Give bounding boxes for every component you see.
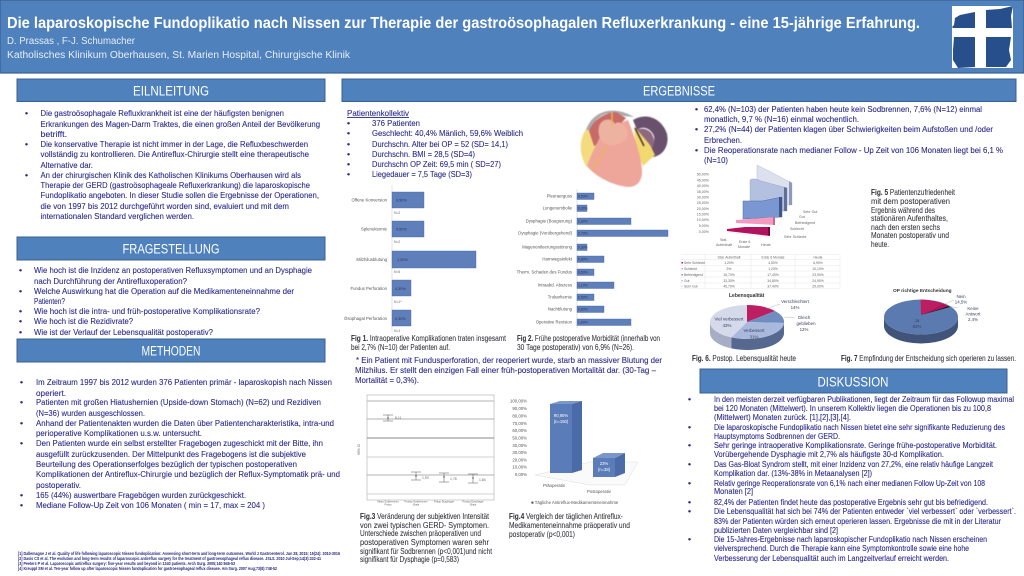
text block: Patientenkollektiv: Durchschn. BMI = 28,5 (SD=4) — [372, 149, 475, 159]
text block: Einleitung: internationalen Standard verglichen werden. — [40, 211, 194, 221]
chart: Fig 7 decision pie: 14,5% — [955, 300, 967, 304]
chart: Fig 4 medication intake: 60,00% — [512, 428, 527, 433]
references: [4] Kreuppl SM et al. Ten-year follow up after laparoscopic Nissen fundoplication for gastroesophageal reflux disease. Am Surg. 2007 Aug;73(8):748-52 — [18, 566, 277, 571]
references: [3] Peeters P et al. Laparoscopic antireflux surgery: five-year results and beyond in 1340 patients. Arch Surg. 2005;140:946-53 — [18, 561, 235, 566]
text block: Fragestellung: Wie hoch ist die Inzidenz an postoperativen Refluxsymptomen und an Dysphagie — [34, 265, 312, 275]
chart: Fig 4 medication intake: 10,00% — [512, 464, 527, 470]
chart: Fig 7 decision pie: Antwort — [966, 312, 981, 316]
chart: Fig 6 quality of life pie: 12% — [800, 327, 808, 332]
chart: Fig 2 postoperative morbidity: Nachblutung — [548, 306, 573, 312]
chart: Fig 1 intraoperative complications: N=1* — [394, 300, 402, 304]
chart: Fig 6 quality of life pie: Gleich — [798, 315, 811, 320]
chart: Fig 5 satisfaction 3D area chart: 35,00% — [697, 190, 710, 194]
heading: Diskussion — [700, 369, 1007, 393]
chart: Fig 3 symptom intensity: 95% CI — [357, 444, 361, 455]
text block: results bullets: • — [695, 104, 698, 114]
text block: Diskussion: • — [688, 440, 691, 450]
text block: results bullets: • — [695, 145, 698, 155]
text block: Methoden: perioperative Komplikationen u.s.w. untersucht. — [36, 428, 202, 438]
caption: Fig 3: signifikant für Sodbrennen (p<0,001)und nicht — [360, 547, 493, 556]
text block: Fragestellung: • — [19, 265, 22, 275]
caption: Fig 2: Fig 2. Frühe postoperative Morbidität (innerhalb von — [517, 334, 660, 343]
chart: Fig 7 decision pie: 83% — [913, 324, 921, 329]
caption: Fig 6: Fig. 6. Postop. Lebensqualität heute — [692, 354, 796, 363]
text block: Diskussion: Verbesserung der Lebensqualität auch im Langzeitverlauf erreicht werden. — [714, 553, 949, 563]
chart: Fig 4 medication intake: ■ Tägliche Antireflux-Medikamenteneinnahme — [531, 500, 619, 505]
text block: results bullets: • — [695, 124, 698, 134]
table: Fig 5 data: 4,50% — [768, 261, 778, 265]
heading: Ergebnisse: ERGEBNISSE — [643, 84, 715, 98]
text block: Methoden: postoperativ. — [36, 480, 81, 490]
chart: Fig 2 postoperative morbidity: 0,50% — [578, 296, 588, 300]
caption: Fig 1: bei 2,7% (N=10) der Patienten auf. — [351, 343, 450, 352]
icon: hospital cross logo — [952, 6, 1013, 68]
text block: Fragestellung: Wie hoch ist die Rezidivrate? — [34, 316, 133, 326]
text block: Einleitung: Erkrankungen des Magen-Darm Traktes, die einen großen Anteil der Bevölkerung — [40, 119, 320, 129]
text block: Einleitung: • — [25, 170, 28, 180]
text block: Fragestellung: • — [19, 286, 22, 296]
chart: Fig 1 intraoperative complications: Fundus Perforation — [350, 286, 388, 291]
caption: Fig 3 — [360, 512, 493, 564]
table: Fig 5 data — [681, 254, 840, 288]
text block: Patientenkollektiv: Geschlecht: 40,4% Mänlich, 59,6% Weiblich — [372, 128, 523, 138]
text block: Fragestellung: • — [19, 306, 22, 316]
chart: Fig 1 intraoperative complications: N=1 — [394, 329, 400, 333]
chart: Fig 2 postoperative morbidity: Magenentleerungsstörung — [522, 244, 573, 250]
chart: Fig 3 symptom intensity: 1,78 — [450, 477, 457, 481]
chart: Fig 2 postoperative morbidity: Therm. Schaden des Fundus — [517, 270, 572, 274]
text block: Diskussion: publizierten Daten vergleichbar sind [2] — [714, 525, 838, 535]
chart: Fig 6 quality of life pie: Lebensqualität — [729, 293, 765, 299]
caption: Fig 3: Fig.3 Veränderung der subjektiven Intensität — [360, 512, 490, 521]
text block: mortality note: * Ein Patient mit Fundusperforation, der reoperiert wurde, starb an massiver Blutung der — [356, 355, 662, 365]
references — [18, 551, 340, 571]
chart: Fig 4 medication intake — [510, 398, 638, 505]
chart: Fig 4 medication intake: 80,00% — [512, 414, 527, 418]
chart: Fig 3 symptom intensity: 1,84 — [479, 478, 486, 482]
text block: Patientenkollektiv: 376 Patienten — [372, 118, 420, 128]
heading: Fragestellung: FRAGESTELLUNG — [122, 242, 220, 256]
affiliation: Katholisches Klinikum Oberhausen, St. Marien Hospital, Chirurgische Klinik — [7, 50, 351, 61]
text block: Patientenkollektiv: • — [347, 149, 350, 159]
chart: Fig 2 postoperative morbidity: Trokarhernie — [548, 294, 573, 300]
text block: Fragestellung: Welche Auswirkung hat die Operation auf die Medikamenteneinnahme der — [34, 286, 294, 296]
text block: Einleitung: betrifft. — [40, 129, 67, 139]
chart: Fig 5 satisfaction 3D area chart: Monate — [738, 245, 750, 249]
chart: Fig 3 symptom intensity: Präop Dysphagie — [434, 500, 455, 504]
chart: Fig 2 postoperative morbidity: Pleuraerguss — [547, 194, 572, 198]
text block: Fragestellung: Wie ist der Verlauf der Lebensqualität postoperativ? — [34, 327, 213, 337]
text block: Methoden: Beurteilung des Operationserfolges bezüglich der typischen postoperativen — [36, 459, 297, 469]
chart: Fig 5 satisfaction 3D area chart: 45,00% — [697, 178, 710, 182]
caption: Fig 5 — [871, 188, 956, 249]
chart: Fig 1 intraoperative complications: N=5 — [394, 270, 400, 274]
text block: mortality note: Mortalität = 0,3%). — [355, 375, 419, 385]
chart: Fig 1 intraoperative complications: 0,50% — [396, 228, 407, 232]
icon: stomach illustration — [581, 111, 668, 187]
chart: Fig 2 postoperative morbidity: 0,80% — [578, 308, 588, 312]
text block: Einleitung: vollständig zu kontrollieren. Die Antireflux-Chirurgie stellt eine therapeutische — [40, 149, 309, 159]
chart: Fig 7 decision pie — [884, 288, 981, 344]
text block: Patientenkollektiv: Patientenkollektiv — [347, 108, 410, 118]
chart: Fig 7 decision pie: 2,4% — [968, 317, 978, 322]
table: Fig 5 data: 10,10% — [812, 267, 824, 271]
table: Fig 5 data: Sehr Schlecht — [684, 261, 705, 265]
caption: Fig 3: postoperativen Symptomen waren sehr — [360, 538, 489, 547]
table: Fig 5 data: 3% — [727, 267, 731, 271]
text block: Diskussion: • — [688, 459, 691, 469]
chart: Fig 5 satisfaction 3D area chart: Befriedigend — [795, 221, 815, 225]
chart: Fig 2 postoperative morbidity: Intraabd. Abszess — [538, 282, 572, 288]
table: Fig 5 data: 23,90% — [812, 273, 824, 277]
text block: Diskussion: Vorübergehende Dysphagie mit 2,7% als häufigste 30-d Komplikation. — [714, 449, 944, 459]
table: Fig 5 data: 34,80% — [767, 279, 779, 283]
chart: Fig 3 symptom intensity: Mean Sodbrennen — [377, 500, 399, 504]
chart: Fig 1 intraoperative complications: Ösophagal Perforation — [344, 316, 388, 321]
text block: Fragestellung: Wie hoch ist die intra- und früh-postoperative Komplikationsrate? — [34, 306, 260, 316]
chart: Fig 7 decision pie: Keine — [967, 306, 979, 311]
chart: Fig 1 intraoperative complications: N=2 — [394, 211, 400, 215]
text block: Diskussion — [688, 394, 1016, 563]
references: [1] Dallemagne J et al. Quality of life following laparoscopic Nissen fundoplication: Assessing short-term and long-term outcomes. World J Gastroenterol. Jun 28, 2015; 15(24): 3010-3016 — [18, 551, 340, 556]
title: Die laparoskopische Fundoplikatio nach Nissen zur Therapie der gastroösophagalen Refluxerkrankung - eine 15-jährige Erfahrung. — [7, 15, 920, 32]
chart: Fig 3 symptom intensity: Skala — [470, 502, 477, 506]
chart: Fig 4 medication intake: 20,00% — [512, 458, 527, 462]
chart: Fig 4 medication intake: 50,00% — [512, 436, 527, 440]
chart: Fig 5 satisfaction 3D area chart: 15,00% — [697, 212, 710, 216]
text block: Patientenkollektiv — [347, 108, 523, 179]
chart: Fig 2 postoperative morbidity: Operative Revision — [536, 320, 573, 324]
table: Fig 5 data: Gut — [684, 279, 690, 283]
text block: Methoden: (N=36) wurden ausgeschlossen. — [36, 408, 145, 418]
table: Fig 5 data: 24,90% — [812, 279, 824, 283]
caption: Fig 1 — [351, 334, 507, 352]
caption: Fig 4: Medikamenteneinnahme präoperativ und — [509, 521, 630, 530]
chart: Fig 7 decision pie: Ja — [915, 318, 920, 323]
text block: Methoden: Den Patienten wurde ein selbst erstellter Fragebogen zugeschickt mit der Bitte, ihn — [36, 438, 323, 448]
caption: Fig 5: Fig. 5 Patientenzufriedenheit — [871, 188, 956, 197]
chart: Fig 6 quality of life pie: 14% — [791, 305, 799, 310]
table: Fig 5 data: 33,30% — [723, 279, 735, 283]
text block: Patientenkollektiv: Durchschn OP Zeit: 69,5 min ( SD=27) — [372, 159, 501, 169]
text block: Fragestellung: Patienten? — [34, 296, 65, 306]
chart: Fig 4 medication intake: Postoperativ — [587, 489, 612, 494]
chart: Fig 4 medication intake: (n=38) — [598, 467, 611, 472]
chart: Fig 6 quality of life pie: Verschlechtert — [781, 299, 810, 304]
text block: Methoden: ausgefüllt zurückzusenden. Der Mittelpunkt des Fragebogens ist die subjektive — [36, 449, 306, 459]
text block: Patientenkollektiv: • — [347, 128, 350, 138]
caption: Fig 5: stationären Aufenthaltes, — [871, 214, 948, 223]
table: Fig 5 data: 29,00% — [812, 284, 824, 288]
chart: Fig 6 quality of life pie: Verbessert — [744, 328, 765, 333]
table: Fig 5 data: Sehr Gut — [684, 284, 698, 288]
text block: Diskussion: Hauptsymptoms Sodbrennen der GERD. — [714, 431, 840, 441]
chart: Fig 1 intraoperative complications: 0,50% — [396, 198, 407, 202]
table: Fig 5 data: 16,70% — [723, 273, 735, 277]
authors: D. Prassas , F-J. Schumacher — [7, 36, 136, 47]
text block: mortality note — [355, 355, 662, 385]
text block: Fragestellung: nach Durchführung der Antirefluxoperation? — [34, 276, 187, 286]
text block: Fragestellung: • — [19, 316, 22, 326]
text block: Diskussion: • — [688, 497, 691, 507]
chart: Fig 3 symptom intensity — [357, 395, 494, 506]
chart: Fig 5 satisfaction 3D area chart: 30,00% — [697, 196, 710, 200]
text block: Diskussion: (Mittelwert) Monaten zurück. [1],[2],[3],[4]. — [714, 412, 851, 422]
text block: Diskussion: • — [688, 534, 691, 544]
chart: Fig 5 satisfaction 3D area chart: Heute — [761, 243, 771, 247]
chart: Fig 2 postoperative morbidity: Lungenembolie — [543, 206, 573, 210]
chart: Fig 4 medication intake: 90,00% — [512, 406, 527, 411]
chart: Fig 1 intraoperative complications: 0,30% — [395, 317, 406, 321]
text block: Diskussion: • — [688, 394, 691, 404]
text block: Methoden: • — [20, 377, 23, 387]
chart: Fig 4 medication intake: Präoperativ — [543, 483, 566, 488]
text block: Methoden: • — [20, 500, 23, 510]
table: Fig 5 data: Schlecht — [684, 267, 697, 271]
heading: Diskussion: DISKUSSION — [818, 374, 888, 390]
heading: Methoden: METHODEN — [142, 344, 200, 358]
caption: Fig 5: heute. — [871, 240, 889, 249]
text block: Einleitung: • — [25, 139, 28, 149]
caption: Fig 5: mit dem postoperativen — [871, 197, 950, 206]
text block: Diskussion: • — [688, 478, 691, 488]
chart: Fig 2 postoperative morbidity: 0,50% — [578, 270, 588, 274]
table: Fig 5 data: Heute — [813, 256, 823, 260]
chart: Fig 5 satisfaction 3D area chart: Sehr Gut — [803, 210, 817, 214]
text block: Methoden: • — [20, 397, 23, 407]
chart: Fig 5 satisfaction 3D area chart — [697, 165, 817, 249]
chart: Fig 5 satisfaction 3D area chart: 40,00% — [697, 184, 710, 188]
text block: Methoden: operiert. — [36, 388, 66, 398]
table: Fig 5 data: 6,90% — [813, 261, 823, 265]
heading: Einleitung — [17, 79, 325, 102]
heading: Fragestellung — [17, 237, 325, 260]
caption: Fig 4: Fig.4 Vergleich der täglichen Antireflux- — [509, 512, 623, 521]
chart: Fig 2 postoperative morbidity — [517, 189, 668, 328]
chart: Fig 2 postoperative morbidity: Dysphagie (Vorübergehend) — [518, 230, 573, 236]
text block: Methoden: Patienten mit großen Hiatushernien (Upside-down Stomach) (N=62) und Rezidiven — [36, 397, 321, 407]
text block: Einleitung: Therapie der GERD (gastroösophageale Refluxerkrankung) die laparoskopische — [40, 180, 310, 190]
table: Fig 5 data: 1,20% — [724, 261, 734, 265]
text block: Diskussion: • — [688, 422, 691, 432]
text block: Patientenkollektiv: • — [347, 118, 350, 128]
caption: Fig 2 — [517, 334, 660, 352]
chart: Fig 6 quality of life pie: 43% — [723, 323, 731, 328]
chart: Fig 2 postoperative morbidity: 0,50% — [578, 194, 588, 198]
chart: Fig 2 postoperative morbidity: 0,80% — [578, 258, 588, 262]
chart: Fig 3 symptom intensity: Postop Dysphagie — [462, 500, 484, 504]
chart: Fig 7 decision pie: OP richtige Entscheidung — [893, 288, 952, 294]
chart: Fig 3 symptom intensity: Präop — [385, 502, 392, 506]
chart: Fig 5 satisfaction 3D area chart: 20,00% — [697, 207, 710, 211]
header banner — [0, 0, 1024, 73]
chart: Fig 3 symptom intensity: 1,93 — [422, 476, 429, 480]
caption: Fig 4 — [509, 512, 630, 539]
heading: Methoden — [17, 339, 325, 362]
chart: Fig 5 satisfaction 3D area chart: Sehr Schlecht — [784, 235, 806, 239]
chart: Fig 2 postoperative morbidity: 0,30% — [578, 246, 588, 250]
chart: Fig 6 quality of life pie: geblieben — [796, 321, 816, 326]
text block: Einleitung: die von 1997 bis 2012 durchgeführt worden sind, evaluiert und mit dem — [40, 201, 289, 211]
chart: Fig 4 medication intake: 90,90% — [554, 413, 568, 418]
text block: mortality note: Milzhilus. Er stellt den einzigen Fall einer früh-postoperativen Mortalität dar. (30-Tag – — [355, 365, 656, 375]
chart: Fig 2 postoperative morbidity: 1,60% — [578, 220, 588, 224]
text block: results bullets: monatlich, 9,7 % (N=16) einmal wochentlich. — [704, 114, 859, 124]
chart: Fig 5 satisfaction 3D area chart: 50,00% — [697, 172, 710, 176]
table: Fig 5 data: 45,70% — [723, 284, 735, 288]
heading: Ergebnisse — [342, 79, 1016, 102]
references: [2] Davis CS et al. The evolution and long-term results of laparoscopic antireflux surgery for the treatment of gastroesophageal reflux disease. JSLS. 2010 Jul-Sep;14(3):332-41 — [18, 556, 321, 561]
chart: Fig 3 symptom intensity: Skala — [413, 502, 420, 506]
chart: Fig 3 symptom intensity: 8,11 — [395, 416, 401, 420]
chart: Fig 1 intraoperative complications: Splenektomie — [361, 226, 388, 232]
text block: results bullets: Erbrechen. — [704, 135, 742, 145]
text block: Einleitung: • — [25, 108, 28, 118]
table: Fig 5 data: 17,40% — [767, 273, 779, 277]
chart: Fig 2 postoperative morbidity: 2,70% — [578, 232, 588, 236]
text block: Einleitung: Fundoplikatio angeboten. In dieser Studie sollen die Ergebnisse der Operationen, — [40, 190, 319, 200]
chart: Fig 3 symptom intensity: Postop Sodbrennen — [405, 500, 428, 504]
chart: Fig 5 satisfaction 3D area chart: Aufenthalt — [716, 243, 732, 247]
caption: Fig 2: 30 Tage postoperativ) von 6,9% (N=26). — [517, 343, 634, 352]
caption: Fig 5: Monaten postoperativ und — [871, 231, 949, 240]
text block: results bullets: (N=10) — [704, 155, 728, 165]
chart: Fig 6 quality of life pie: 31% — [750, 334, 758, 340]
text block: Patientenkollektiv: Durchschn. Alter bei OP = 52 (SD= 14,1) — [372, 139, 508, 149]
chart: Fig 4 medication intake: (n=150) — [554, 419, 569, 424]
chart: Fig 2 postoperative morbidity: 1,60% — [578, 320, 588, 324]
chart: Fig 2 postoperative morbidity: Harnwegsinfekt — [542, 256, 573, 262]
text block: Methoden — [20, 377, 340, 510]
chart: Fig 1 intraoperative complications: N=2 — [394, 240, 400, 244]
caption: Fig 3: Unterschiede zwischen präoperativen und — [360, 529, 481, 538]
chart: Fig 5 satisfaction 3D area chart: 5,00% — [699, 224, 710, 228]
text block: Patientenkollektiv: • — [347, 169, 350, 179]
caption: Fig 1: Fig 1. Intraoperative Komplikationen traten insgesamt — [351, 334, 507, 343]
text block: Einleitung: Die gastroösophagale Refluxkrankheit ist eine der häufigsten benignen — [40, 108, 284, 118]
table: Fig 5 data: 1,20% — [768, 267, 778, 271]
heading: Einleitung: EILNLEITUNG — [133, 84, 209, 98]
chart: Fig 2 postoperative morbidity: 1,10% — [578, 284, 588, 288]
chart: Fig 5 satisfaction 3D area chart: 25,00% — [697, 201, 710, 205]
chart: Fig 5 satisfaction 3D area chart: Erste 6 — [739, 240, 750, 244]
chart: Fig 6 quality of life pie — [710, 293, 816, 350]
chart: Fig 5 satisfaction 3D area chart: 0,00% — [699, 230, 710, 234]
text block: results bullets: 27,2% (N=44) der Patienten klagen über Schwierigkeiten beim Aufstoßen und /oder — [704, 124, 993, 134]
text block: Methoden: • — [20, 490, 23, 500]
caption: Fig 4: postoperativ (p<0,001) — [509, 530, 575, 539]
table: Fig 5 data: 37,40% — [767, 284, 779, 288]
chart: Fig 5 satisfaction 3D area chart: Gut — [799, 215, 805, 219]
caption: Fig 5: nach den ersten sechs — [871, 223, 940, 232]
chart: Fig 1 intraoperative complications: 1,30% — [397, 258, 408, 262]
chart: Fig 5 satisfaction 3D area chart: 10,00% — [697, 218, 710, 222]
text block: results bullets: 62,4% (N=103) der Patienten haben heute kein Sodbrennen, 7,6% (N=12) einmal — [704, 104, 982, 114]
text block: Diskussion: Monaten [2] — [714, 486, 753, 496]
chart: Fig 4 medication intake: 100,00% — [510, 398, 527, 404]
text block: Fragestellung: • — [19, 327, 22, 337]
text block: Methoden: Anhand der Patientenakten wurden die Daten über Patientencharakteristika, intra-und — [36, 418, 334, 428]
text block: Methoden: 165 (44%) auswertbare Fragebögen wurden zurückgeschickt. — [36, 490, 246, 500]
chart: Fig 5 satisfaction 3D area chart: Stat. — [720, 238, 727, 242]
chart: Fig 4 medication intake: 0,00% — [515, 472, 527, 477]
text block: Einleitung — [25, 108, 320, 221]
text block: Methoden: • — [20, 438, 23, 448]
text block: Diskussion: Komplikation dar. (13%-38% in Metaanalysen [2]) — [714, 468, 872, 478]
chart: Fig 5 satisfaction 3D area chart: Schlecht — [790, 227, 804, 231]
text block: Einleitung: Alternative dar. — [40, 160, 93, 170]
chart: Fig 1 intraoperative complications — [344, 185, 476, 333]
text block: Methoden: Mediane Follow-Up Zeit von 106 Monaten ( min = 17, max = 204 ) — [36, 500, 265, 510]
chart: Fig 4 medication intake: 23% — [600, 461, 608, 466]
caption: Fig 3: von zwei typischen GERD- Symptomen. — [360, 521, 489, 530]
text block: Diskussion: vielversprechend. Durch die Therapie kann eine Symptomkontrolle sowie eine hohe — [714, 543, 969, 553]
caption: Fig 3: signifikant für Dysphagie (p=0,583) — [360, 555, 459, 564]
text block: Patientenkollektiv: • — [347, 159, 350, 169]
chart: Fig 2 postoperative morbidity: 0,30% — [578, 206, 588, 210]
text block: results bullets — [695, 104, 1003, 165]
text block: Patientenkollektiv: • — [347, 139, 350, 149]
table: Fig 5 data: Stat. Aufenthalt — [718, 256, 741, 260]
text block: Methoden: Im Zeitraum 1997 bis 2012 wurden 376 Patienten primär - laparoskopish nach Nissen — [36, 377, 332, 387]
text block: Einleitung: An der chirurgischen Klinik des Katholischen Klinikums Oberhausen wird als — [40, 170, 301, 180]
table: Fig 5 data: Befriedigend — [684, 273, 703, 277]
chart: Fig 7 decision pie: Nein — [956, 294, 966, 299]
chart: Fig 1 intraoperative complications: Offene Konversion — [351, 198, 388, 202]
text block: results bullets: Die Reoperationsrate nach medianer Follow - Up Zeit von 106 Monaten liegt bei 6,1 % — [704, 145, 1003, 155]
chart: Fig 1 intraoperative complications: 0,30% — [395, 287, 406, 291]
text block: Einleitung: Die konservative Therapie ist nicht immer in der Lage, die Refluxbeschwerden — [40, 139, 308, 149]
text block: Diskussion: • — [688, 506, 691, 516]
text block: Fragestellung — [19, 265, 312, 337]
chart: Fig 4 medication intake: 40,00% — [512, 443, 527, 448]
chart: Fig 1 intraoperative complications: Milzhilusblutung — [356, 257, 388, 262]
caption: Fig 5: Ergebnis während des — [871, 206, 935, 215]
table: Fig 5 data: Erste 6 Monate — [762, 256, 785, 260]
text block: Methoden: Komplikationen der Antireflux-Chirurgie und bezüglich der Reflux-Symptomatik prä- und — [36, 469, 340, 479]
chart: Fig 6 quality of life pie: Viel verbessert — [715, 316, 744, 322]
chart: Fig 4 medication intake: 30,00% — [512, 450, 527, 455]
text block: Methoden: • — [20, 418, 23, 428]
chart: Fig 4 medication intake: 70,00% — [512, 421, 527, 426]
text block: Patientenkollektiv: Liegedauer = 7,5 Tage (SD=3) — [372, 169, 472, 179]
chart: Fig 2 postoperative morbidity: Dysphagie (Bougierung) — [526, 218, 573, 224]
